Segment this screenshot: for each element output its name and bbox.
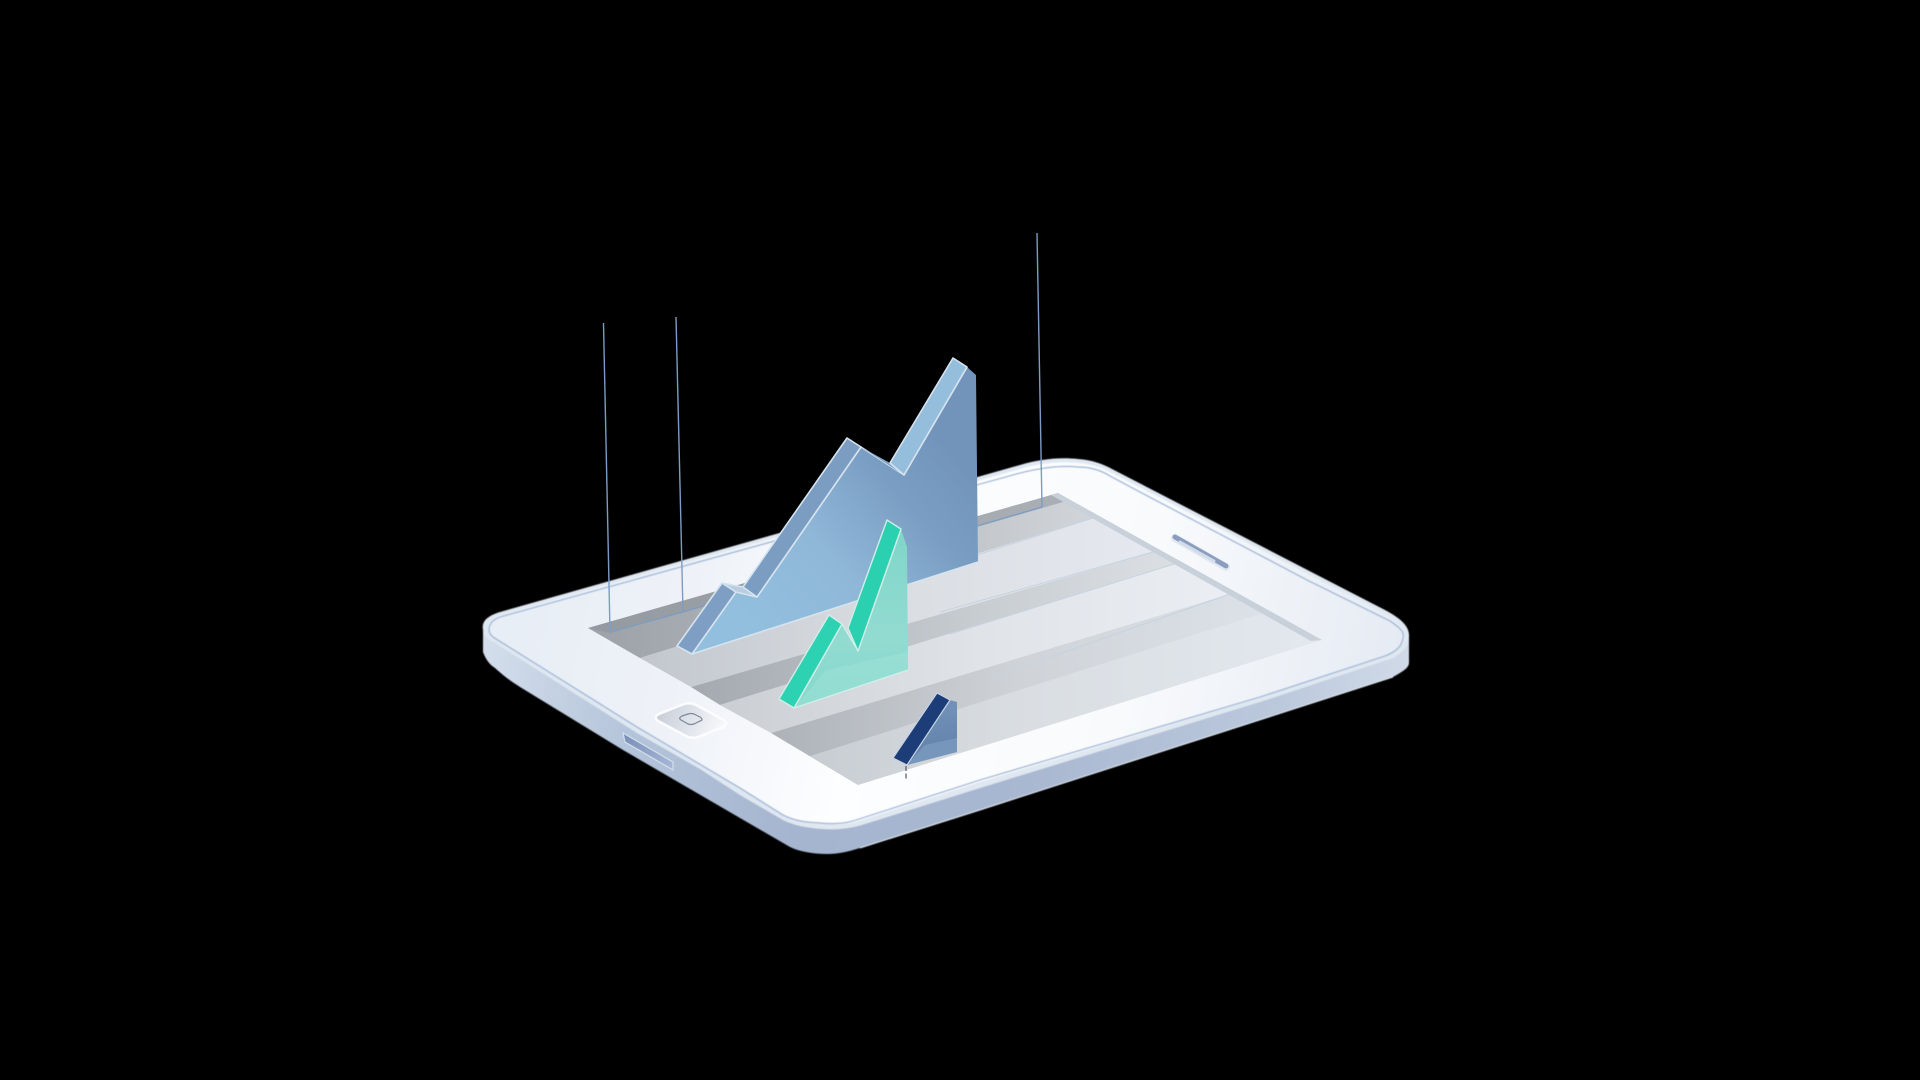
blue chart ridge 2 [743,438,861,597]
screen band 4 [720,564,1230,733]
tablet body [483,458,1409,854]
screen lower stripe [810,613,1322,785]
screen top-right bevel [1051,493,1322,641]
guide base line [610,507,1042,632]
blue chart front face [692,367,978,654]
green chart front face [794,529,908,708]
green chart ridge 2 [848,520,901,651]
vertical guide line 2 [676,317,683,612]
vertical guide line 3 [1037,233,1042,507]
screen band 5 [771,594,1322,785]
home button [656,703,726,738]
tablet side wall [483,630,1409,854]
speaker highlight [1180,542,1214,561]
large blue area chart [677,358,978,654]
side slot [623,733,673,770]
screen band rule lines [930,518,1230,678]
navy chart front face [907,700,957,765]
green area chart [779,520,908,708]
screen top-left bevel [588,493,1070,633]
tablet top face [488,462,1404,825]
screen band 1 [588,493,1093,658]
home button icon [680,714,702,724]
home button plate [656,703,726,738]
blue chart peak connector [861,447,904,475]
tablet inset outline [489,466,1403,824]
screen [588,493,1322,785]
side bottom highlight [860,677,1393,848]
speaker rim [1175,538,1226,567]
screen band 2 [640,518,1153,687]
green chart front outline [794,529,908,708]
green chart lower glow [794,652,908,708]
blue chart front outline [692,367,978,654]
speaker grille [1175,537,1226,567]
speaker slot [1175,537,1226,566]
tablet bevel [483,458,1409,829]
navy area chart [893,693,957,780]
green chart ridge 1 [779,615,842,708]
screen band 3 [691,552,1174,705]
navy chart ridge [893,693,950,765]
vertical guide line 1 [604,323,610,632]
blue chart ridge 1 [677,583,736,654]
navy chart base [907,738,957,765]
navy chart drop line [905,766,907,780]
blue chart ridge 3 [890,358,967,475]
blue chart valley [722,583,757,597]
